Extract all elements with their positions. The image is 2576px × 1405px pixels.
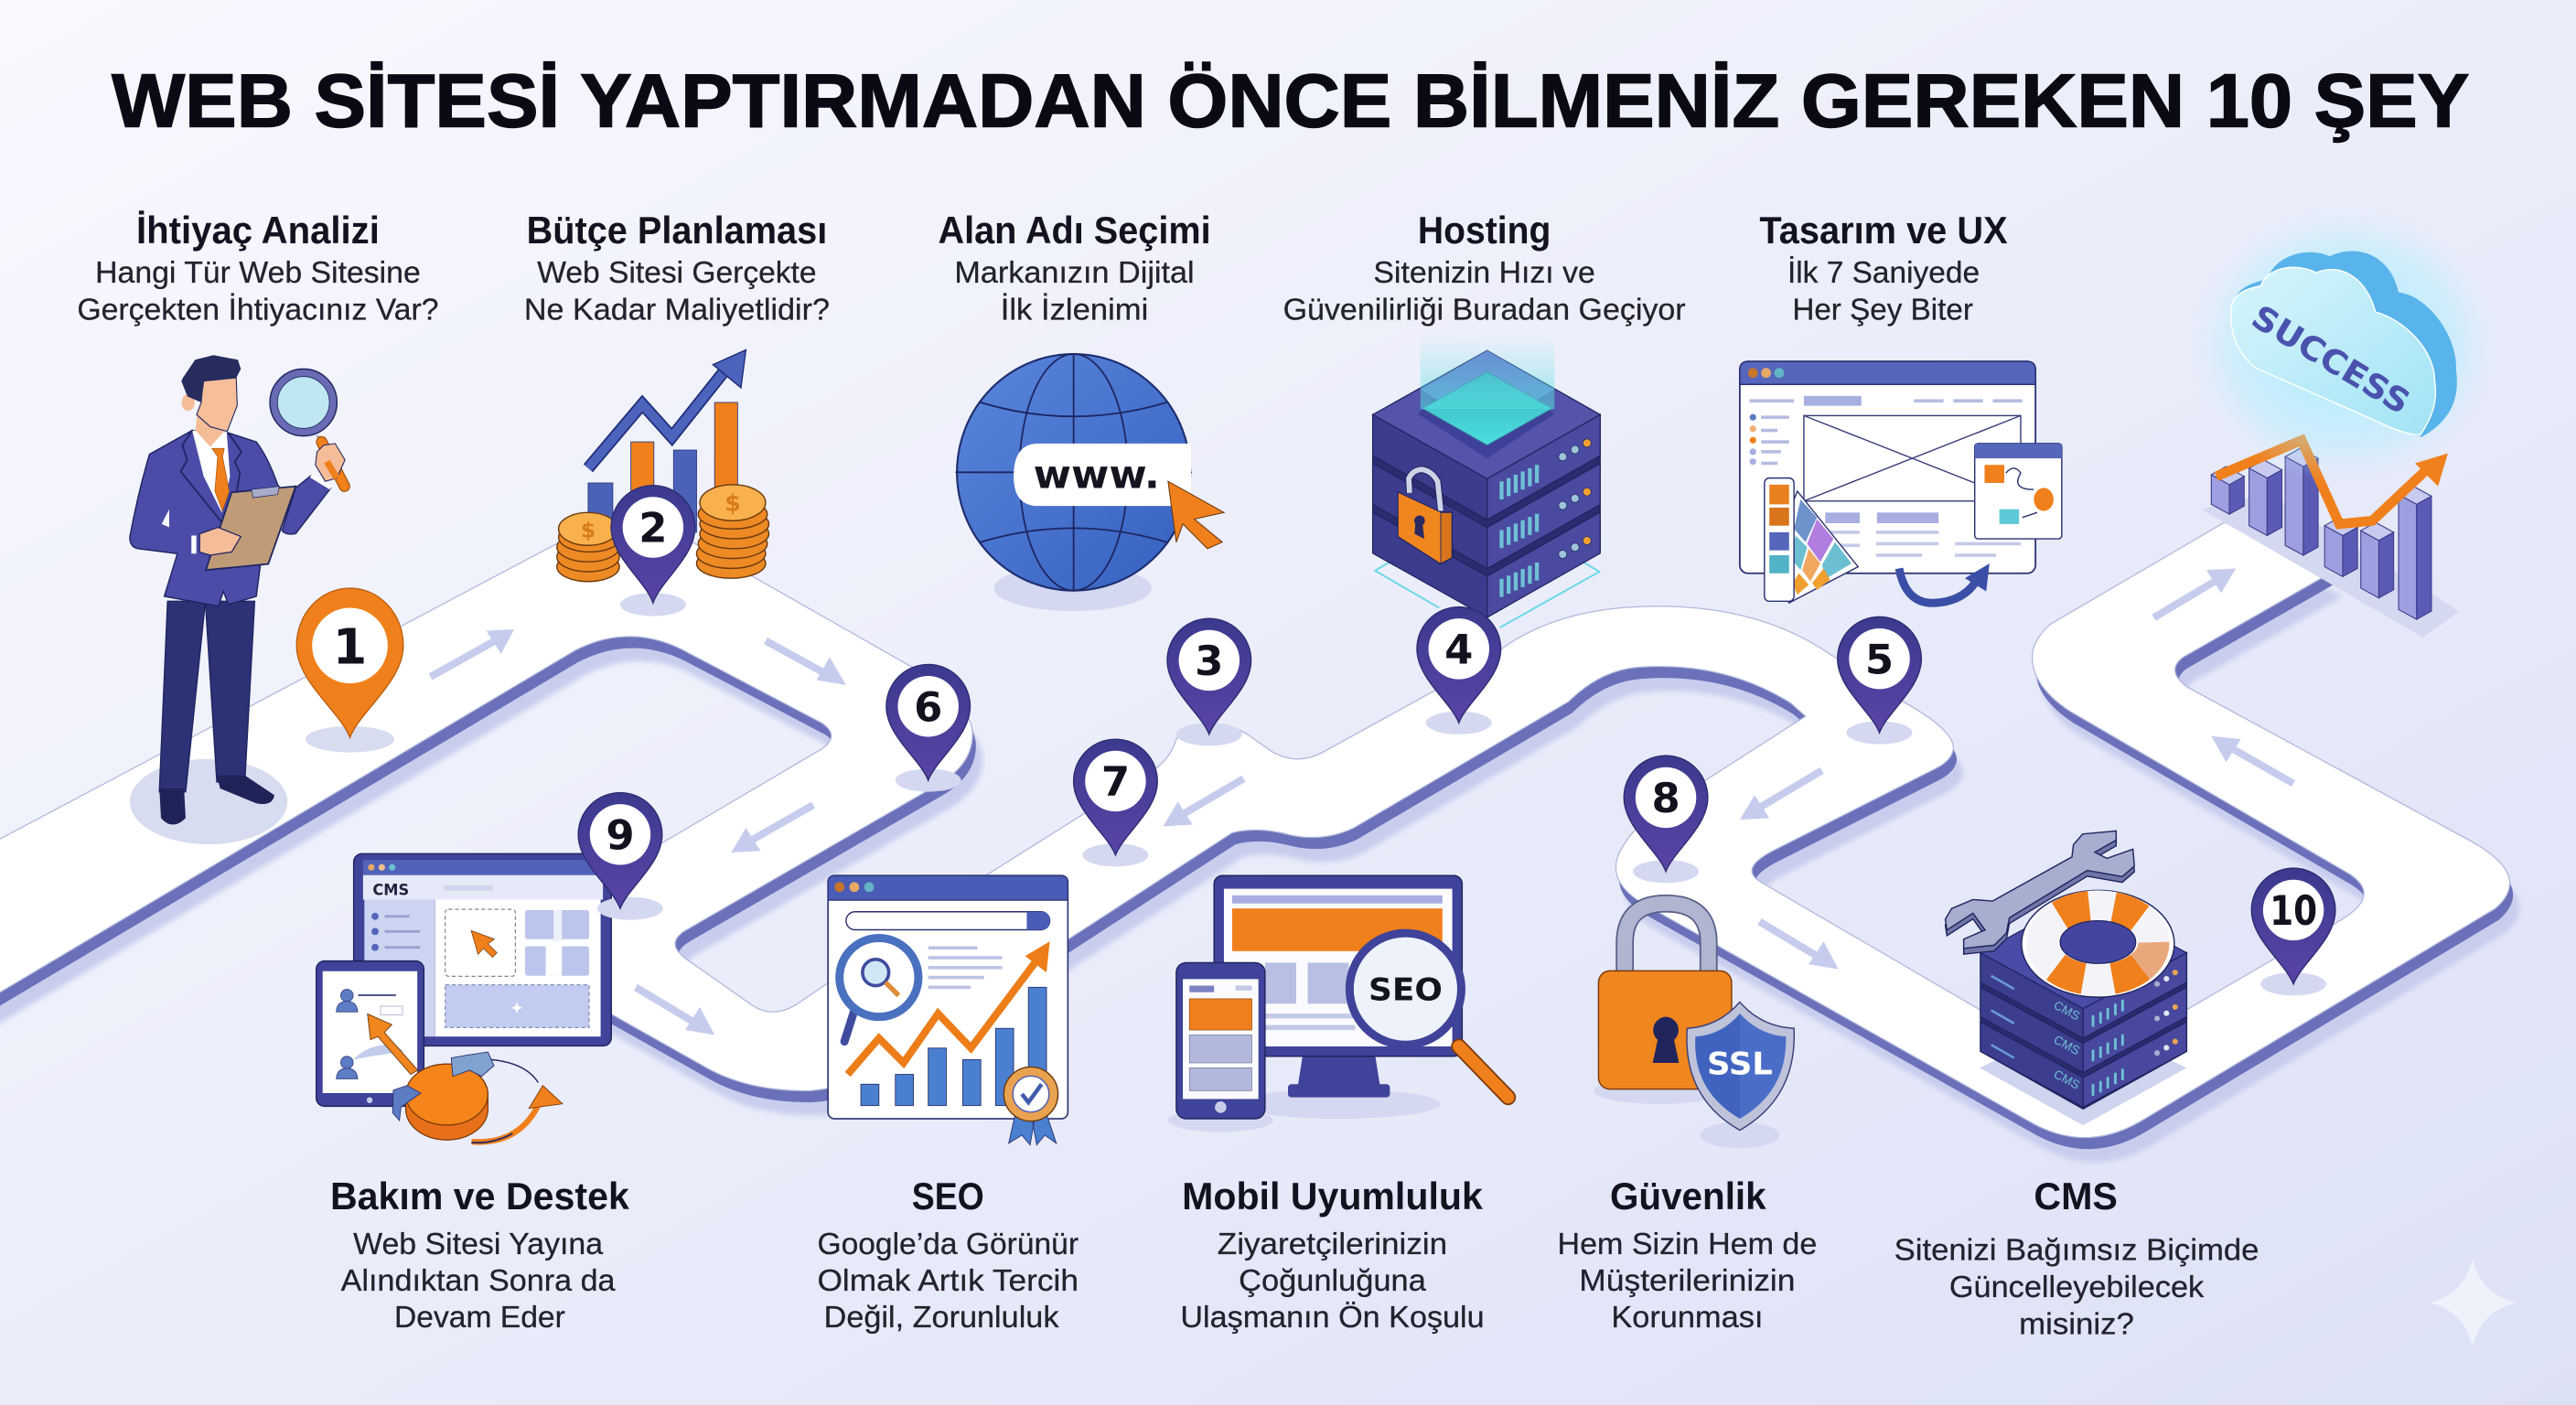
text: Mobil Uyumluluk: Ulaşmanın Ön Koşulu	[1180, 1301, 1485, 1335]
text: İhtiyaç Analizi: Gerçekten İhtiyacınız Var?	[77, 293, 439, 327]
text: Bakım ve Destek: Alındıktan Sonra da	[341, 1264, 616, 1298]
pin 6: 6	[914, 682, 942, 731]
text: Hosting: Sitenizin Hızı ve	[1373, 256, 1595, 290]
icon: CMS server stack with lifebuoy and wrench: CMS	[2052, 998, 2082, 1023]
text: İhtiyaç Analizi: İhtiyaç Analizi	[136, 209, 380, 252]
icon: businessman with magnifier and clipboard	[130, 355, 345, 844]
pin 5: 5	[1865, 635, 1894, 683]
text: Alan Adı Seçimi: Alan Adı Seçimi	[938, 209, 1211, 252]
pin 9	[578, 793, 663, 920]
icon: CMS server stack with lifebuoy and wrench: CMS	[2052, 1067, 2082, 1092]
pin 3: 3	[1195, 637, 1223, 685]
text: Tasarım ve UX: Her Şey Biter	[1792, 293, 1973, 327]
text: Güvenlik: Güvenlik	[1610, 1175, 1766, 1217]
text: SEO	[817, 1175, 1079, 1335]
icon: sparkle	[2430, 1259, 2517, 1347]
text: Tasarım ve UX: Tasarım ve UX	[1759, 209, 2008, 252]
pin 8: 8	[1651, 774, 1680, 822]
pin 4	[1417, 607, 1501, 735]
icon: mobile and desktop with SEO magnifier: SEO	[1368, 972, 1443, 1009]
text: Mobil Uyumluluk: Çoğunluğuna	[1239, 1264, 1426, 1298]
icon: CMS server stack with lifebuoy and wrench: CMS	[2052, 1033, 2082, 1057]
icon: mobile and desktop with SEO magnifier	[1168, 875, 1508, 1132]
text: CMS: Güncelleyebilecek	[1949, 1271, 2205, 1304]
text: Güvenlik	[1558, 1175, 1817, 1335]
text: SEO: Olmak Artık Tercih	[817, 1264, 1079, 1298]
pin 3	[1167, 618, 1251, 745]
text: Güvenlik: Hem Sizin Hem de	[1558, 1228, 1817, 1261]
text: CMS: CMS	[2034, 1175, 2118, 1217]
text: Tasarım ve UX: İlk 7 Saniyede	[1787, 256, 1980, 290]
icon: budget bars, arrow and coins	[557, 350, 768, 582]
icon: success bars and trend arrow	[2202, 440, 2459, 638]
icon: maintenance CMS monitor, tablet and pie: CMS	[372, 881, 409, 899]
text: Bütçe Planlaması: Bütçe Planlaması	[527, 209, 827, 252]
text: Bütçe Planlaması: Ne Kadar Maliyetlidir?	[524, 293, 830, 327]
icon: globe with www bar and cursor: www.	[1034, 452, 1160, 498]
road direction arrows	[431, 568, 2293, 1035]
text: Alan Adı Seçimi	[938, 209, 1211, 327]
text: Alan Adı Seçimi: İlk İzlenimi	[1001, 293, 1148, 327]
text: SEO: Değil, Zorunluluk	[824, 1301, 1059, 1335]
icon: budget bars, arrow and coins: $	[724, 490, 741, 517]
text: Tasarım ve UX	[1759, 209, 2008, 327]
pin 6	[886, 664, 970, 792]
text: Mobil Uyumluluk: Mobil Uyumluluk	[1182, 1175, 1483, 1217]
pin 9: 9	[606, 810, 635, 859]
text: İhtiyaç Analizi: Hangi Tür Web Sitesine	[95, 256, 421, 290]
pin 7	[1074, 739, 1157, 866]
icon: success cloud	[2188, 205, 2500, 485]
title: WEB SİTESİ YAPTIRMADAN ÖNCE BİLMENİZ GEREKEN 10 ŞEY	[112, 58, 2469, 143]
text: Bakım ve Destek: Bakım ve Destek	[330, 1175, 629, 1217]
pin 2: 2	[639, 504, 667, 552]
icon: budget bars, arrow and coins: $	[581, 517, 596, 542]
text: CMS: Sitenizi Bağımsız Biçimde	[1894, 1233, 2259, 1267]
pin 10	[2251, 868, 2335, 995]
text: Bakım ve Destek: Devam Eder	[394, 1301, 565, 1335]
text: Güvenlik: Korunması	[1611, 1301, 1763, 1335]
icon: hosting server stack	[1373, 334, 1600, 627]
pin 8	[1624, 756, 1708, 883]
pin 5	[1838, 617, 1921, 745]
text: Hosting: Hosting	[1418, 209, 1551, 252]
text: CMS	[1894, 1175, 2259, 1341]
text: Mobil Uyumluluk: Ziyaretçilerinizin	[1218, 1228, 1447, 1261]
icon: design wireframe window with palette	[1740, 361, 2062, 603]
text: Mobil Uyumluluk	[1180, 1175, 1485, 1335]
icon: maintenance CMS monitor, tablet and pie	[317, 853, 611, 1142]
text: İhtiyaç Analizi	[77, 209, 439, 327]
text: SEO: SEO	[912, 1175, 984, 1217]
text: Bütçe Planlaması	[524, 209, 830, 327]
pin 4: 4	[1444, 626, 1473, 674]
text: Bütçe Planlaması: Web Sitesi Gerçekte	[537, 256, 817, 290]
icon: padlock and SSL shield	[1594, 904, 1794, 1148]
text: Bakım ve Destek	[330, 1175, 629, 1335]
winding road	[0, 522, 2519, 1163]
icon: CMS server stack with lifebuoy and wrench	[1946, 831, 2186, 1125]
pin 1: 1	[333, 618, 367, 676]
text: Hosting	[1283, 209, 1686, 327]
pin 2	[611, 486, 695, 616]
pin 1	[296, 588, 403, 753]
icon: success cloud: SUCCESS	[2245, 298, 2416, 422]
text: Alan Adı Seçimi: Markanızın Dijital	[954, 256, 1195, 290]
text: Güvenlik: Müşterilerinizin	[1579, 1264, 1795, 1298]
icon: globe with www bar and cursor	[956, 354, 1224, 611]
text: SEO: Google’da Görünür	[817, 1228, 1079, 1261]
text: Hosting: Güvenilirliği Buradan Geçiyor	[1283, 293, 1686, 327]
icon: SEO browser window with chart	[828, 875, 1068, 1145]
pin 10: 10	[2270, 886, 2317, 935]
text: CMS: misiniz?	[2019, 1307, 2134, 1341]
pin 7: 7	[1101, 757, 1130, 806]
icon: padlock and SSL shield: SSL	[1707, 1046, 1773, 1083]
text: Bakım ve Destek: Web Sitesi Yayına	[353, 1228, 604, 1261]
